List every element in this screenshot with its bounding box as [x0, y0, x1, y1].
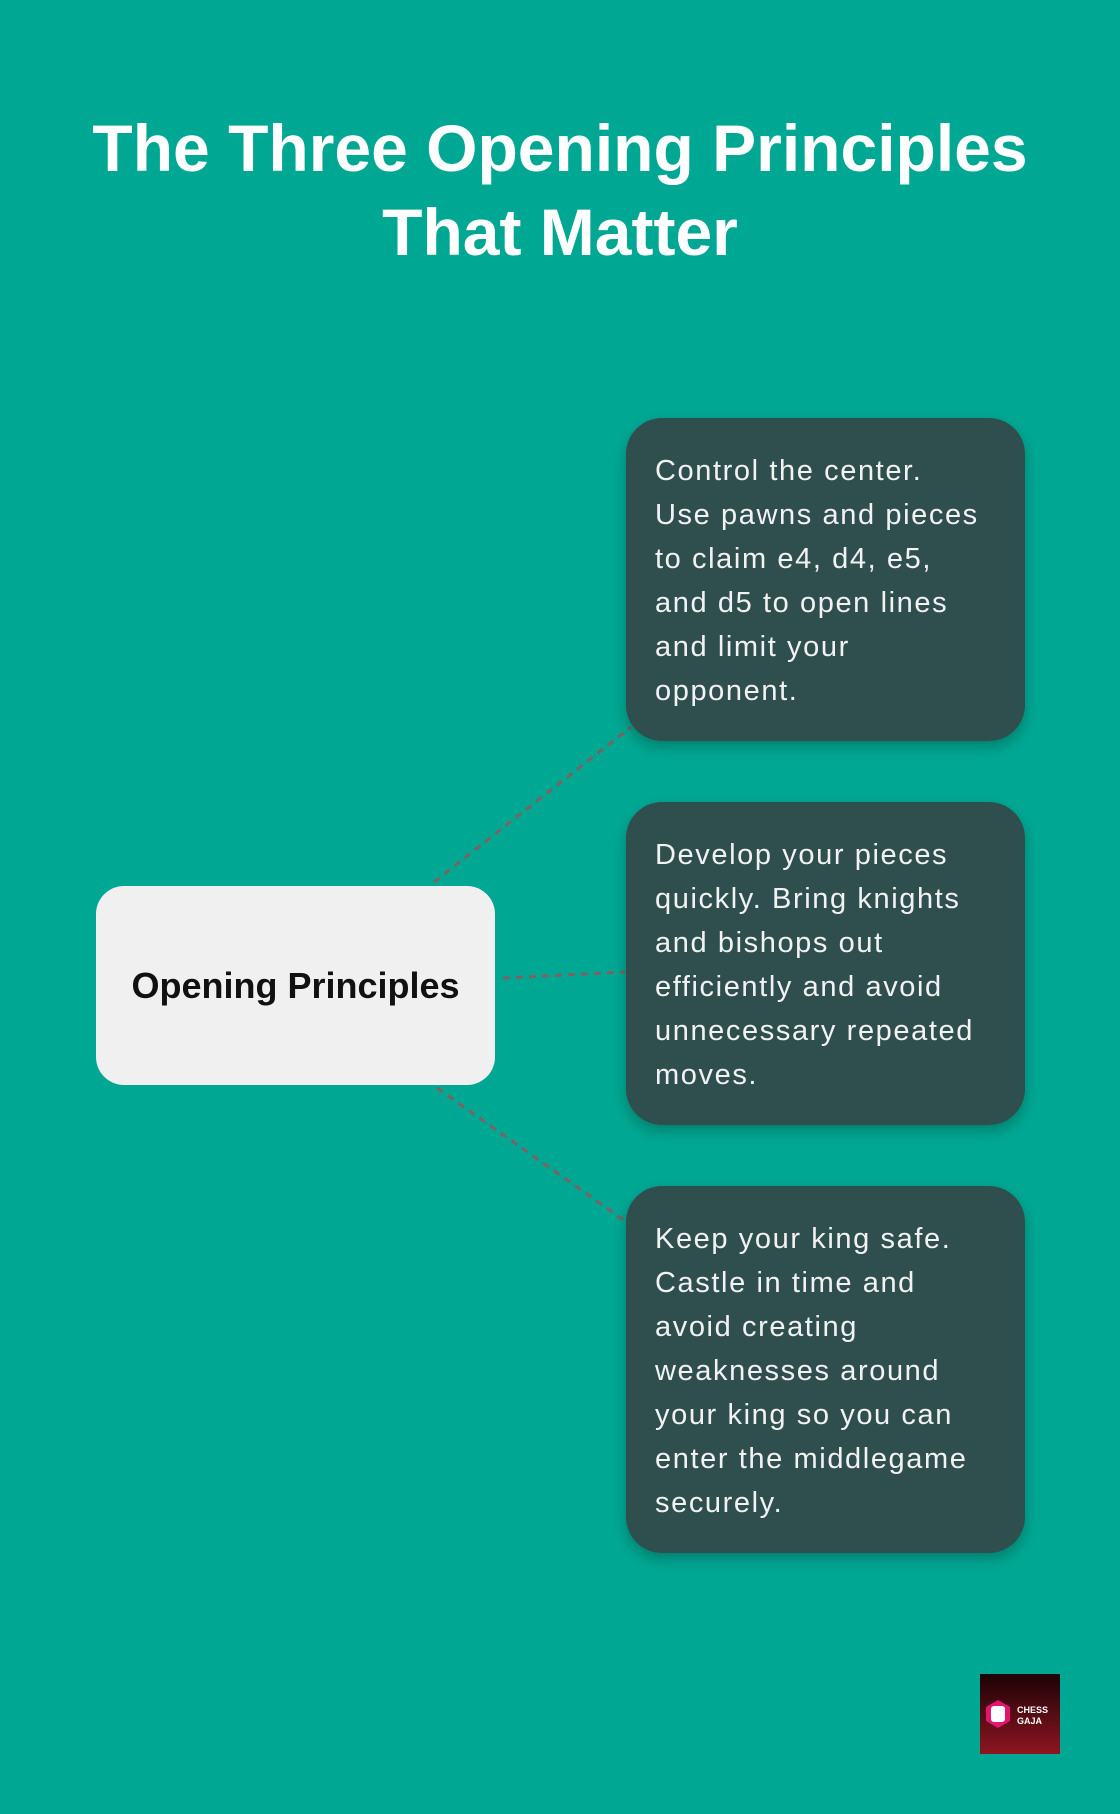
card: control the center: Control the center.: [655, 455, 922, 487]
card: king safety: enter the middlegame: [655, 1443, 968, 1475]
card: develop pieces: efficiently and avoid: [655, 971, 943, 1003]
card: king safety: [626, 1186, 1025, 1553]
card: develop pieces: Develop your pieces: [655, 839, 948, 871]
card: develop pieces: [626, 802, 1025, 1125]
title: That Matter: [382, 195, 738, 269]
card: develop pieces: moves.: [655, 1059, 758, 1091]
card: king safety: your king so you can: [655, 1399, 953, 1431]
card: control the center: and d5 to open lines: [655, 587, 948, 619]
card: control the center: [626, 418, 1025, 741]
card: king safety: avoid creating: [655, 1311, 858, 1343]
card: develop pieces: quickly. Bring knights: [655, 883, 960, 915]
title: [92, 111, 1028, 269]
title: The Three Opening Principles: [92, 111, 1028, 185]
card: control the center: to claim e4, d4, e5,: [655, 543, 932, 575]
logo: CHESS: [1017, 1705, 1048, 1715]
logo: [980, 1674, 1060, 1754]
card: king safety: securely.: [655, 1487, 783, 1519]
card: control the center: opponent.: [655, 675, 798, 707]
card: king safety: Keep your king safe.: [655, 1223, 951, 1255]
card: develop pieces: and bishops out: [655, 927, 884, 959]
center node: [96, 886, 495, 1085]
logo: GAJA: [1017, 1716, 1043, 1726]
card: develop pieces: unnecessary repeated: [655, 1015, 974, 1047]
card: king safety: weaknesses around: [655, 1355, 940, 1387]
card: king safety: Castle in time and: [655, 1267, 916, 1299]
center node: Opening Principles: [131, 964, 460, 1006]
card: control the center: and limit your: [655, 631, 850, 663]
card: control the center: Use pawns and pieces: [655, 499, 979, 531]
